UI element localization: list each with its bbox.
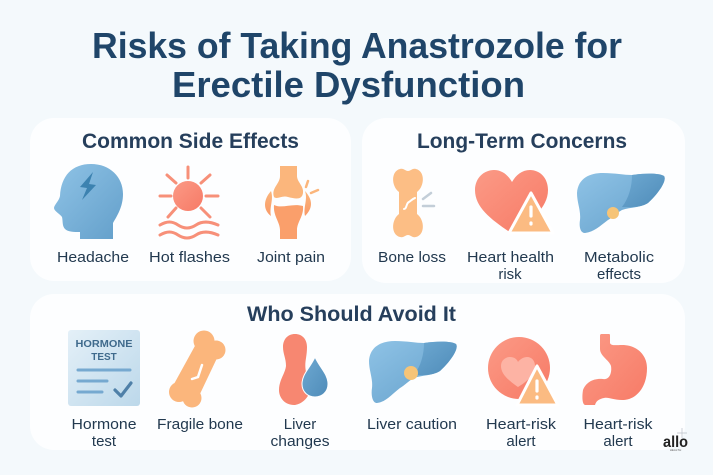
title xyxy=(92,25,622,105)
label: headache: Headache xyxy=(57,249,129,266)
label: hot flashes: Hot flashes xyxy=(149,249,230,266)
icon: hot flashes xyxy=(160,167,218,238)
icon: bone loss xyxy=(393,169,434,237)
panel: common side effects xyxy=(30,118,351,281)
panel: long-term concerns xyxy=(362,118,685,283)
icon: joint pain xyxy=(265,166,318,239)
logo: allo health xyxy=(663,428,688,452)
logo: allo health: allo xyxy=(663,434,688,451)
label: heart health risk xyxy=(467,249,554,283)
label: liver caution: Liver caution xyxy=(367,416,457,433)
icon: liver caution xyxy=(369,341,457,403)
icon: liver, metabolic effects xyxy=(577,173,665,233)
label: metabolic effects: Metabolic xyxy=(584,249,655,266)
label: hormone test: test xyxy=(92,433,117,450)
icon: heart health risk xyxy=(475,170,553,233)
title: Risks of Taking Anastrozole for xyxy=(92,25,622,66)
label: heart-risk alert 1 xyxy=(486,416,557,450)
logo: allo health: HEALTH xyxy=(670,448,681,452)
label: hormone test: Hormone xyxy=(72,416,136,433)
icon: hormone test card: TEST xyxy=(91,352,117,363)
title: Erectile Dysfunction xyxy=(172,64,525,105)
panel: who should avoid it xyxy=(30,294,688,452)
label: heart-risk alert 2: alert xyxy=(603,433,633,450)
label: hormone test xyxy=(72,416,136,450)
label: heart health risk: Heart health xyxy=(467,249,554,266)
icon: headache xyxy=(54,164,123,239)
icon: hormone test card xyxy=(68,330,140,406)
icon: fragile bone xyxy=(169,330,226,408)
label: heart-risk alert 2 xyxy=(584,416,653,450)
heading: common side effects: Common Side Effects xyxy=(82,130,299,153)
label: heart-risk alert 2: Heart-risk xyxy=(584,416,653,433)
heading: long-term concerns: Long-Term Concerns xyxy=(417,130,627,153)
label: joint pain: Joint pain xyxy=(257,249,325,266)
label: heart-risk alert 1: alert xyxy=(506,433,536,450)
label: heart health risk: risk xyxy=(498,266,522,283)
label: fragile bone: Fragile bone xyxy=(157,416,243,433)
label: liver changes xyxy=(270,416,330,450)
label: heart-risk alert 1: Heart-risk xyxy=(486,416,557,433)
icon: heart-risk alert circle xyxy=(488,337,558,405)
icon: stomach xyxy=(582,334,647,405)
label: liver changes: Liver xyxy=(284,416,316,433)
label: metabolic effects: effects xyxy=(597,266,641,283)
icon: hormone test card: HORMONE xyxy=(76,339,133,350)
label: liver changes: changes xyxy=(270,433,330,450)
icon: liver changes xyxy=(279,334,328,405)
label: metabolic effects xyxy=(584,249,655,283)
label: bone loss: Bone loss xyxy=(378,249,446,266)
heading: who should avoid it: Who Should Avoid It xyxy=(247,303,456,326)
